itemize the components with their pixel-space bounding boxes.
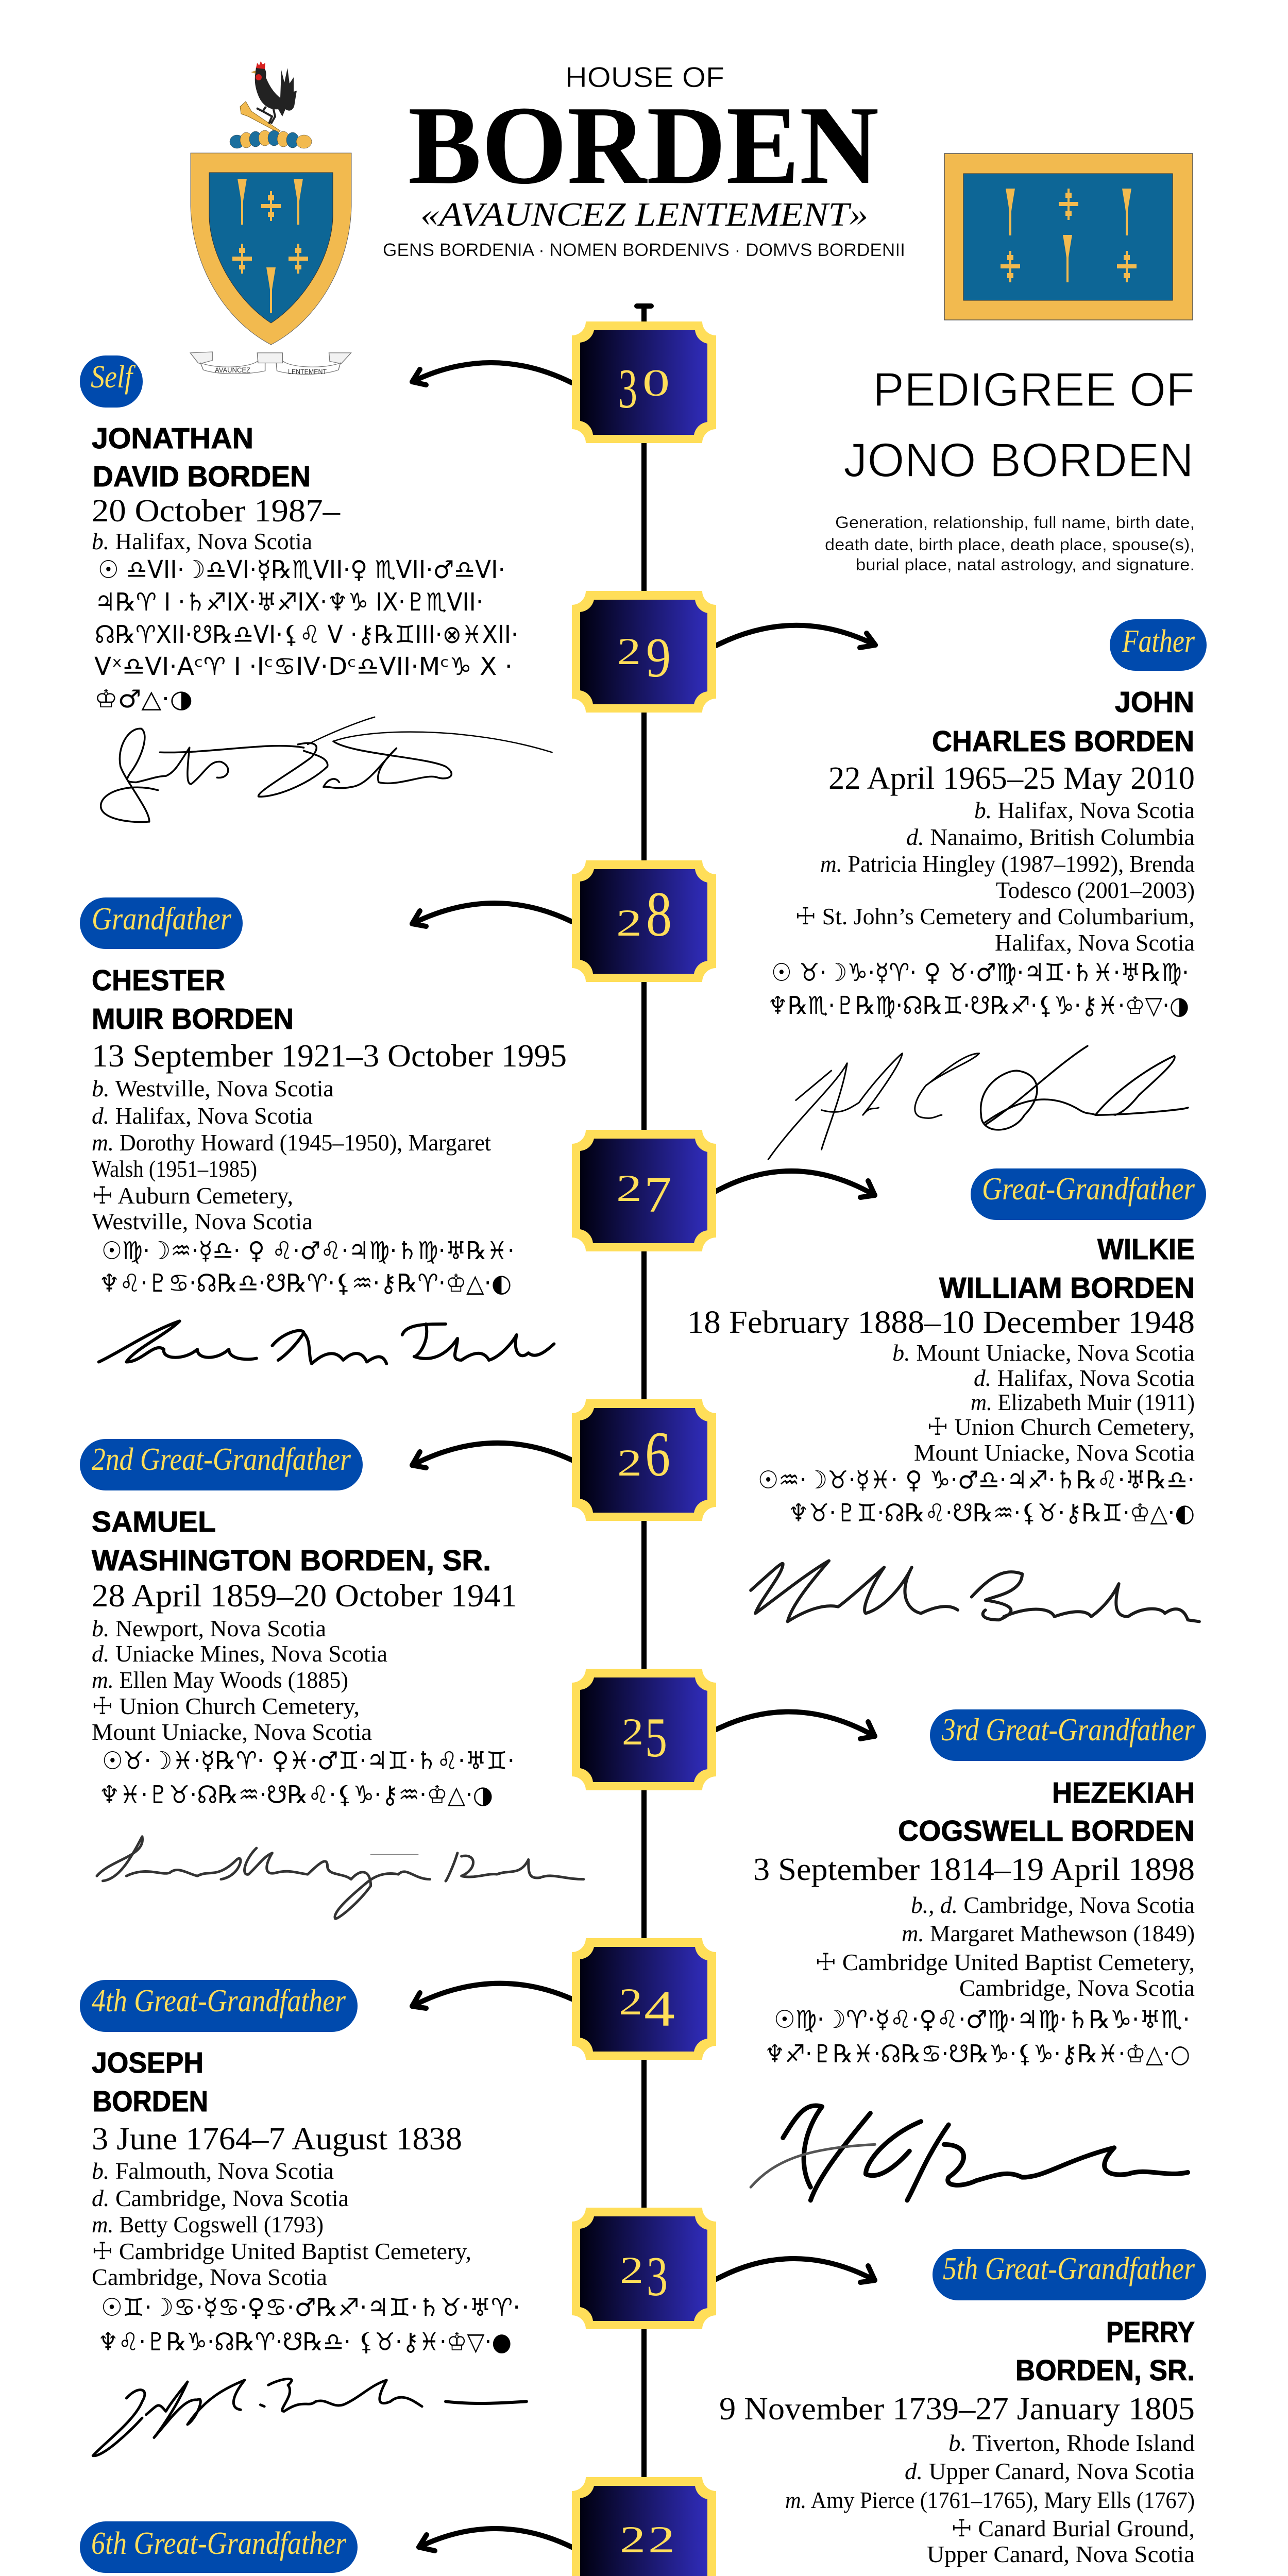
biographical details: b., d. Cambridge, Nova Scotia — [911, 1892, 1195, 1918]
natal astrology: ♃℞♈ I ·♄♐IX·♅♐IX·♆♑ IX·♇♏VII· — [95, 588, 483, 617]
signature: H. C. Borden — [751, 2106, 1188, 2200]
crest: rooster on wreath with trumpet — [230, 61, 312, 148]
signature: Joseph Borden — [93, 2379, 527, 2456]
panel: generation 29, John Charles Borden — [768, 619, 1207, 1159]
biographical details: d. Uniacke Mines, Nova Scotia — [92, 1640, 387, 1667]
name: JOSEPH — [92, 2046, 204, 2079]
dates: 28 April 1859–20 October 1941 — [92, 1579, 517, 1614]
name — [92, 2046, 208, 2118]
natal astrology: ☉♊·☽♋·☿♋·♀♋·♂℞♐·♃♊·♄♉·♅♈· — [101, 2293, 520, 2322]
natal astrology: ♆♉·♇♊·☊℞♌·☋℞♒·⚸♉·⚷℞♊·♔△·◐ — [788, 1499, 1195, 1528]
natal astrology — [98, 2293, 520, 2357]
biographical details: m. Ellen May Woods (1885) — [92, 1667, 348, 1693]
text: description: burial place, natal astrology, and signature. — [856, 555, 1195, 574]
name: WILKIE — [1097, 1233, 1195, 1266]
biographical details: b. Tiverton, Rhode Island — [948, 2430, 1195, 2456]
generation marker 27 — [572, 1130, 716, 1251]
generation marker 28 — [572, 860, 716, 982]
arrow: generation 23 to 5th Great-Grandfather — [716, 2259, 875, 2282]
arrow: generation 26 to 2nd Great-Grandfather — [412, 1443, 572, 1468]
natal astrology — [94, 555, 518, 714]
biographical details: m. Amy Pierce (1761–1765), Mary Ells (1767) — [785, 2487, 1195, 2513]
biographical details: ☩ Union Church Cemetery, — [92, 1693, 360, 1719]
biographical details — [92, 1615, 387, 1745]
dates: 22 April 1965–25 May 2010 — [828, 761, 1195, 796]
relationship pill: 3rd Great-Grandfather: 3rd Great-Grandfather — [941, 1713, 1195, 1748]
generation marker 24 — [572, 1938, 716, 2060]
relationship pill: 6th Great-Grandfather: 6th Great-Grandfather — [91, 2526, 347, 2561]
natal astrology: ☊℞♈XII·☋℞♎VI·⚸♌ V ·⚷℞♊III·⊗♓XII· — [95, 620, 518, 649]
biographical details: Upper Canard, Nova Scotia — [927, 2541, 1195, 2567]
dates: 18 February 1888–10 December 1948 — [687, 1305, 1195, 1340]
biographical details: m. Margaret Mathewson (1849) — [902, 1920, 1195, 1946]
title: house of: HOUSE OF — [565, 61, 724, 93]
generation marker 24: 4 — [644, 1980, 675, 2037]
signature: Jonathan Borden — [101, 717, 552, 822]
biographical details: m. Elizabeth Muir (1911) — [971, 1389, 1195, 1415]
name: WILLIAM BORDEN — [939, 1272, 1195, 1304]
subtitle names: GENS BORDENIA · NOMEN BORDENIVS · DOMVS BORDENII — [383, 240, 905, 260]
panel: generation 28, Chester Muir Borden — [80, 897, 567, 1364]
natal astrology: ♆℞♏·♇℞♍·☊℞♊·☋℞♐·⚸♑·⚷♓·♔▽·◑ — [768, 991, 1189, 1020]
signature: Samuel Washington Borden — [97, 1837, 584, 1919]
name — [939, 1233, 1195, 1304]
name: CHARLES BORDEN — [932, 725, 1194, 758]
generation marker 22: 2 — [648, 2519, 675, 2561]
biographical details: ☩ St. John’s Cemetery and Columbarium, — [795, 903, 1195, 929]
biographical details: ☩ Cambridge United Baptist Cemetery, — [92, 2238, 471, 2264]
biographical details: b. Newport, Nova Scotia — [92, 1615, 326, 1641]
relationship pill: 4th Great-Grandfather — [80, 1980, 358, 2032]
natal astrology: ☉♒·☽♉·☿♓· ♀ ♑·♂♎·♃♐·♄℞♌·♅℞♎· — [758, 1466, 1195, 1495]
text: description: death date, birth place, death place, spouse(s), — [825, 535, 1195, 554]
dates: 20 October 1987– — [92, 494, 341, 529]
generation marker 29: 9 — [646, 626, 671, 689]
dates: 13 September 1921–3 October 1995 — [92, 1039, 567, 1074]
biographical details: d. Upper Canard, Nova Scotia — [905, 2458, 1195, 2484]
name — [898, 1776, 1195, 1848]
arrow: generation 27 to Great-Grandfather — [716, 1171, 875, 1197]
generation marker 25 — [572, 1669, 716, 1790]
biographical details — [92, 1075, 491, 1234]
generation marker 23 — [572, 2208, 716, 2329]
biographical details: Halifax, Nova Scotia — [995, 929, 1195, 956]
relationship pill: 2nd Great-Grandfather: 2nd Great-Grandfather — [92, 1442, 351, 1477]
name: CHESTER — [92, 964, 225, 997]
name: HEZEKIAH — [1052, 1776, 1195, 1809]
text: description: Generation, relationship, full name, birth date, — [835, 513, 1195, 532]
relationship pill: Great-Grandfather: Great-Grandfather — [982, 1172, 1195, 1207]
biographical details — [892, 1340, 1195, 1466]
natal astrology — [768, 958, 1189, 1020]
motto: «AVAUNCEZ LENTEMENT» — [420, 196, 868, 233]
signature: Wilkie Borden — [751, 1561, 1199, 1621]
natal astrology: ♆♓·♇♉·☊℞♒·☋℞♌·⚸♑·⚷♒·♔△·◑ — [99, 1781, 493, 1809]
panel: generation 25, Hezekiah Cogswell Borden — [751, 1709, 1206, 2200]
title: Borden: BORDEN — [408, 83, 879, 208]
timeline spine with cap and arrowhead — [634, 303, 654, 2576]
biographical details — [92, 2158, 471, 2290]
name — [92, 422, 311, 493]
panel: generation 23, Perry Borden Sr. — [719, 2249, 1206, 2576]
heading: Jono Borden: JONO BORDEN — [843, 433, 1194, 487]
generation marker 25: 2 — [622, 1711, 643, 1753]
arrow: generation 22 to 6th Great-Grandfather — [419, 2529, 572, 2551]
biographical details: Cambridge, Nova Scotia — [959, 1975, 1195, 2001]
name — [92, 1505, 491, 1577]
dates: 9 November 1739–27 January 1805 — [719, 2392, 1195, 2427]
relationship pill: 4th Great-Grandfather: 4th Great-Grandfather — [92, 1984, 346, 2019]
shield: coat of arms — [191, 153, 351, 345]
panel: generation 26, Samuel Washington Borden Sr. — [80, 1439, 584, 1919]
biographical details: b. Falmouth, Nova Scotia — [92, 2158, 334, 2184]
relationship pill: Self — [80, 355, 143, 408]
natal astrology: Vˣ♎VI·Aᶜ♈ I ·Iᶜ♋IV·Dᶜ♎VII·Mᶜ♑ X · — [94, 652, 513, 681]
generation marker 29: 2 — [617, 631, 641, 673]
natal astrology: ♆♐·♇℞♓·☊℞♋·☋℞♑·⚸♑·⚷℞♓·♔△·○ — [765, 2040, 1190, 2069]
relationship pill: 2nd Great-Grandfather — [80, 1439, 363, 1490]
natal astrology — [765, 2005, 1190, 2069]
arrow: generation 28 to Grandfather — [412, 903, 572, 926]
generation marker 24: 2 — [619, 1981, 642, 2023]
biographical details: d. Halifax, Nova Scotia — [974, 1365, 1195, 1391]
biographical details: ☩ Cambridge United Baptist Cemetery, — [815, 1949, 1195, 1975]
generation marker 27: 2 — [616, 1167, 642, 1210]
relationship pill: Father — [1110, 619, 1207, 671]
name: SAMUEL — [92, 1505, 216, 1538]
biographical details: d. Halifax, Nova Scotia — [92, 1103, 313, 1129]
arrow: generation 24 to 4th Great-Grandfather — [412, 1984, 572, 2008]
heading: pedigree of: PEDIGREE OF — [873, 363, 1195, 416]
name: WASHINGTON BORDEN, SR. — [92, 1544, 491, 1577]
biographical details: Westville, Nova Scotia — [92, 1208, 313, 1234]
relationship pill: Self: Self — [91, 360, 136, 395]
natal astrology: ☉ ♉·☽♑·☿♈· ♀ ♉·♂♍·♃♊·♄♓·♅℞♍· — [771, 958, 1189, 987]
biographical details: Mount Uniacke, Nova Scotia — [914, 1439, 1195, 1466]
biographical details — [815, 1892, 1195, 2001]
panel: generation 27, Wilkie William Borden — [687, 1168, 1206, 1621]
generation marker 26: 2 — [617, 1442, 642, 1484]
name: BORDEN — [93, 2085, 208, 2118]
relationship pill: 5th Great-Grandfather — [933, 2249, 1206, 2300]
generation marker 22 — [572, 2477, 716, 2576]
natal astrology: ☉♍·☽♒·☿♎· ♀ ♌·♂♌·♃♍·♄♍·♅℞♓· — [101, 1236, 515, 1265]
name: DAVID BORDEN — [93, 460, 311, 493]
relationship pill: Grandfather — [80, 897, 243, 949]
biographical details: b. Westville, Nova Scotia — [92, 1075, 334, 1101]
biographical details: m. Patricia Hingley (1987–1992), Brenda — [820, 851, 1195, 877]
name: JOHN — [1115, 686, 1194, 719]
heading: pedigree title and description — [825, 363, 1195, 574]
biographical details: m. Dorothy Howard (1945–1950), Margaret — [92, 1129, 491, 1156]
biographical details: Mount Uniacke, Nova Scotia — [92, 1719, 372, 1745]
natal astrology — [758, 1466, 1195, 1528]
generation marker 28: 2 — [616, 902, 642, 944]
birth place: b. Halifax, Nova Scotia — [92, 528, 312, 554]
generation marker 28: 8 — [646, 879, 672, 950]
relationship pill: 6th Great-Grandfather — [80, 2521, 358, 2573]
flag: banner of arms — [944, 154, 1193, 320]
biographical details: m. Betty Cogswell (1793) — [92, 2211, 324, 2238]
motto scroll beneath shield: LENTEMENT — [288, 367, 327, 376]
icon: trumpet held by rooster — [240, 101, 280, 132]
biographical details: b. Mount Uniacke, Nova Scotia — [892, 1340, 1195, 1366]
natal astrology: ♆♌·♇♋·☊℞♎·☋℞♈·⚸♒·⚷℞♈·♔△·◐ — [99, 1269, 512, 1298]
natal astrology: ☉ ♎VII·☽♎VI·☿℞♏VII·♀ ♏VII·♂♎VI· — [98, 555, 505, 584]
name — [932, 686, 1194, 758]
arrow: generation 29 to Father — [716, 625, 875, 648]
text: description — [825, 513, 1195, 574]
relationship pill: Father: Father — [1122, 624, 1195, 659]
biographical details: ☩ Canard Burial Ground, — [951, 2515, 1195, 2541]
natal astrology: ♔♂△·◑ — [94, 685, 193, 714]
arrow: generation 25 to 3rd Great-Grandfather — [716, 1711, 875, 1739]
dates: 3 September 1814–19 April 1898 — [753, 1852, 1195, 1887]
generation marker 27: 7 — [644, 1166, 672, 1223]
name: JONATHAN — [92, 422, 253, 455]
signature: Chester Muir Borden — [99, 1321, 554, 1364]
biographical details: ☩ Auburn Cemetery, — [92, 1182, 293, 1209]
motto scroll beneath shield — [190, 352, 351, 376]
generation marker 30 — [572, 321, 716, 443]
relationship pill: Grandfather: Grandfather — [92, 902, 232, 937]
generation marker 30: 0 — [642, 362, 670, 404]
generation marker 29 — [572, 591, 716, 713]
dates: 3 June 1764–7 August 1838 — [92, 2122, 462, 2157]
relationship pill: 5th Great-Grandfather: 5th Great-Grandfather — [943, 2251, 1195, 2286]
icon: flag trumpets and crosses — [1001, 189, 1137, 282]
generation marker 23: 3 — [647, 2245, 668, 2308]
name: BORDEN, SR. — [1015, 2354, 1195, 2387]
biographical details: Walsh (1951–1985) — [92, 1156, 257, 1182]
header: house title block — [383, 61, 905, 260]
panel: generation 22, Samuel Borden Sr. — [80, 2521, 575, 2576]
biographical details: b. Halifax, Nova Scotia — [974, 797, 1195, 823]
name: MUIR BORDEN — [92, 1003, 294, 1036]
natal astrology: ☉♍·☽♈·☿♌·♀♌·♂♍·♃♍·♄℞♑·♅♏· — [774, 2005, 1190, 2034]
icon: twisted wreath — [230, 130, 312, 148]
biographical details: ☩ Union Church Cemetery, — [927, 1414, 1195, 1440]
biographical details: Todesco (2001–2003) — [996, 877, 1195, 903]
natal astrology — [99, 1236, 515, 1298]
relationship pill: Great-Grandfather — [971, 1168, 1206, 1220]
signature: John C. Borden — [768, 1046, 1188, 1159]
arrow: generation 30 to Self — [412, 363, 572, 385]
biographical details — [795, 797, 1195, 956]
biographical details: d. Cambridge, Nova Scotia — [92, 2185, 349, 2211]
name — [1015, 2316, 1195, 2387]
natal astrology — [99, 1747, 515, 1809]
relationship pill: 3rd Great-Grandfather — [930, 1709, 1206, 1761]
generation marker 23: 2 — [620, 2249, 643, 2292]
panel: generation 30, Jonathan David Borden — [80, 355, 552, 822]
name — [92, 964, 294, 1036]
biographical details — [785, 2430, 1195, 2567]
panel: generation 24, Joseph Borden — [80, 1980, 527, 2456]
generation marker 25: 5 — [645, 1706, 667, 1769]
generation marker 22: 2 — [620, 2519, 646, 2561]
generation marker 26: 6 — [645, 1419, 670, 1489]
biographical details: d. Nanaimo, British Columbia — [906, 824, 1195, 850]
name: PERRY — [1106, 2316, 1195, 2349]
motto scroll beneath shield: AVAUNCEZ — [215, 366, 250, 374]
icon: shield trumpets and crosses — [232, 179, 308, 313]
biographical details: Cambridge, Nova Scotia — [92, 2264, 327, 2290]
natal astrology: ☉♉·☽♓·☿℞♈· ♀♓·♂♊·♃♊·♄♌·♅♊· — [102, 1747, 515, 1775]
generation marker 26 — [572, 1399, 716, 1521]
icon: rooster — [251, 61, 297, 124]
natal astrology: ♆♌·♇℞♑·☊℞♈·☋℞♎· ⚸♉·⚷♓·♔▽·● — [98, 2328, 512, 2357]
generation marker 30: 3 — [618, 358, 637, 420]
name: COGSWELL BORDEN — [898, 1815, 1195, 1848]
